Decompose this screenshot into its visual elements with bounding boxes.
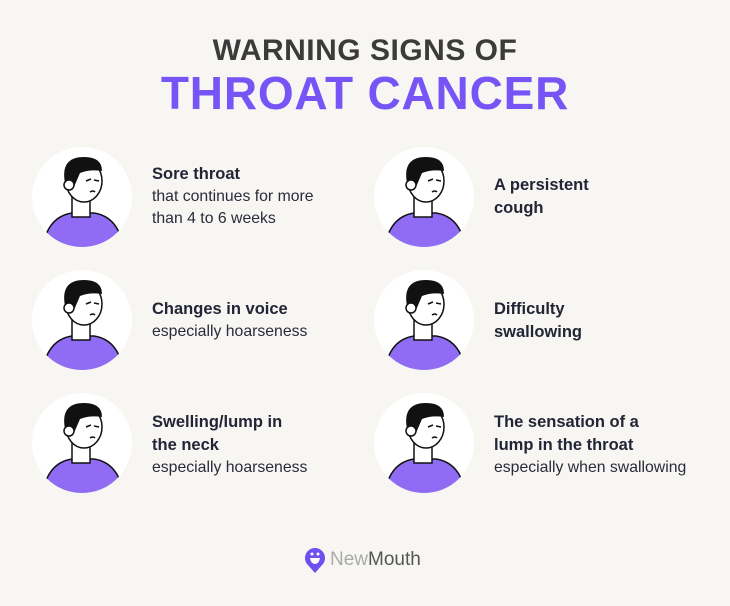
logo (305, 548, 421, 573)
item: sore throat: Sore throat (152, 165, 240, 183)
item: difficulty swallowing (374, 270, 582, 370)
item: persistent cough: A persistent (494, 176, 589, 194)
item: lump sensation: lump in the throat (494, 436, 633, 454)
item: difficulty swallowing: swallowing (494, 323, 582, 341)
item: swelling: especially hoarseness (152, 459, 307, 476)
item: persistent cough (374, 147, 589, 247)
item: changes in voice (32, 270, 307, 370)
item: difficulty swallowing: Difficulty (494, 300, 565, 318)
item: changes in voice: especially hoarseness (152, 323, 307, 340)
item: persistent cough: cough (494, 199, 544, 217)
item: swelling: the neck (152, 436, 219, 454)
item: sore throat: that continues for more (152, 188, 314, 205)
title line 1: WARNING SIGNS OF (213, 34, 517, 67)
item: swelling: Swelling/lump in (152, 413, 282, 431)
title line 2: THROAT CANCER (161, 67, 569, 119)
item: sore throat (32, 147, 314, 247)
item: changes in voice: Changes in voice (152, 300, 288, 318)
item: lump sensation: The sensation of a (494, 413, 639, 431)
item: sore throat: than 4 to 6 weeks (152, 210, 276, 227)
logo: NewMouth (330, 549, 421, 570)
item: lump sensation: especially when swallowing (494, 459, 686, 476)
item: swelling (32, 393, 307, 493)
item: lump sensation (374, 393, 686, 493)
